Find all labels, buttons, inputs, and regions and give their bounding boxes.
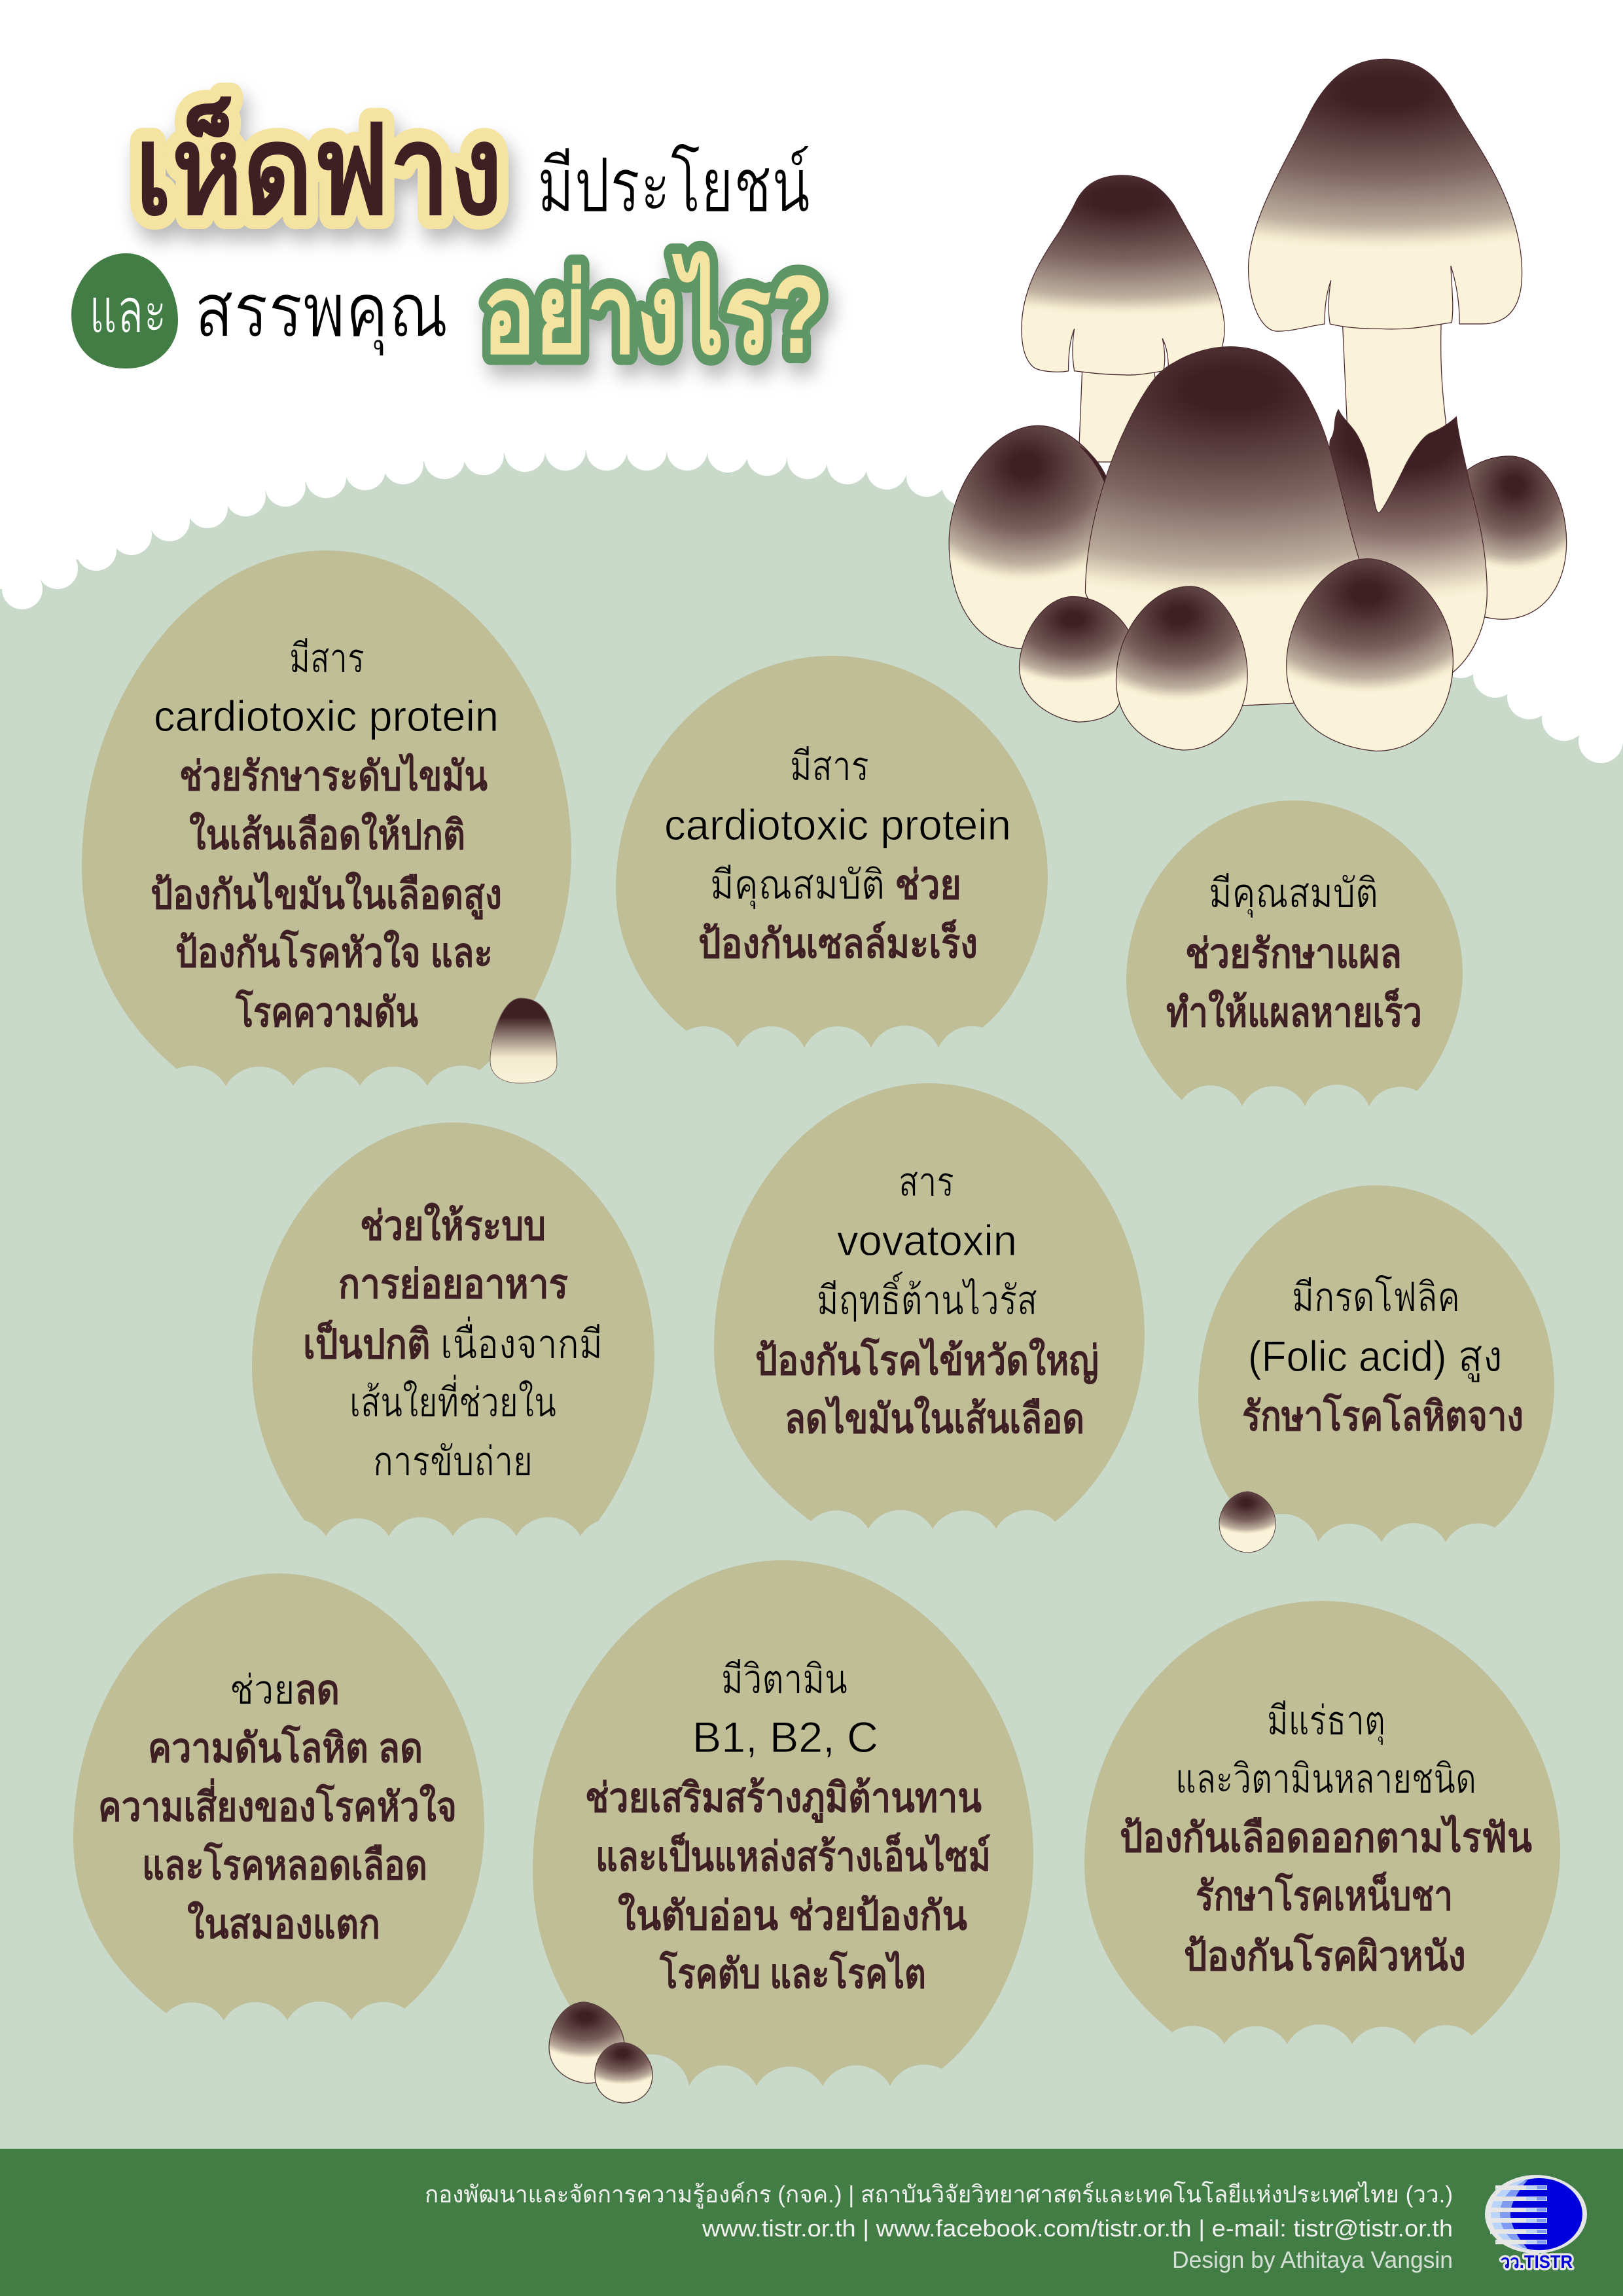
torn volva xyxy=(1316,410,1487,675)
bubble: vitamins B1 B2 C: ในตับอ่อน ช่วยป้องกัน xyxy=(618,1892,967,1939)
bubble: cardiotoxic protein, lipid levels: ในเส้นเลือดให้ปกติ xyxy=(189,812,465,858)
bubble: minerals and vitamins: ป้องกันเลือดออกตามไรฟัน xyxy=(1120,1814,1532,1861)
small egg right xyxy=(1287,559,1453,751)
bubble: vitamins B1 B2 C: โรคตับ และโรคไต xyxy=(659,1950,926,1997)
bubble: blood pressure: ความเสี่ยงของโรคหัวใจ xyxy=(98,1778,457,1830)
footer bar xyxy=(0,2149,1623,2296)
bubble: digestion: เส้นใยที่ช่วยใน xyxy=(349,1374,556,1426)
bubble: digestion: การขับถ่าย xyxy=(373,1439,533,1484)
bubble: minerals and vitamins: ป้องกันโรคผิวหนัง xyxy=(1184,1932,1466,1979)
bubble: folic acid: มีกรดโฟลิค xyxy=(1292,1274,1460,1320)
bubble: cardiotoxic protein, lipid levels: cardiotoxic protein xyxy=(154,692,499,740)
bubble: wound healing: ช่วยรักษาแผล xyxy=(1185,931,1402,977)
icon: small mushroom, folic acid bubble xyxy=(1219,1492,1275,1552)
bubble: minerals and vitamins: และวิตามินหลายชนิด xyxy=(1175,1757,1476,1802)
title word: อย่างไร?: อย่างไร? xyxy=(482,251,825,377)
footer text: www.tistr.or.th | www.facebook.com/tistr.or.th | e-mail: tistr@tistr.or.th xyxy=(702,2215,1453,2242)
green egg badge: และ xyxy=(71,253,178,368)
title xyxy=(71,96,825,377)
right back egg xyxy=(1465,456,1567,619)
bubble: blood pressure xyxy=(73,1573,484,2020)
title word: เห็ดฟาง: เห็ดฟาง xyxy=(135,96,503,240)
bubble: cardiotoxic protein, lipid levels: ช่วยรักษาระดับไขมัน xyxy=(179,753,488,799)
bubble: cardiotoxic protein, lipid levels: โรคความดัน xyxy=(235,988,418,1035)
right mushroom stem xyxy=(1342,321,1450,559)
bubble: cardiotoxic protein, cancer: ป้องกันเซลล์มะเร็ง xyxy=(698,919,978,967)
bubble: vovatoxin: ป้องกันโรคไข้หวัดใหญ่ xyxy=(755,1336,1099,1384)
bubble: cardiotoxic protein, lipid levels: ป้องกันไขมันในเลือดสูง xyxy=(151,871,502,920)
bubble: vitamins B1 B2 C: B1, B2, C xyxy=(692,1713,878,1761)
bubble: blood pressure: ช่วยลด xyxy=(230,1668,340,1713)
bubble: vitamins B1 B2 C: มีวิตามิน xyxy=(721,1657,847,1702)
title words: มีประโยชน์: มีประโยชน์ xyxy=(537,143,810,228)
bubble: cardiotoxic protein, lipid levels xyxy=(82,550,571,1086)
left mushroom cap xyxy=(1022,175,1224,375)
bubble: vovatoxin: ลดไขมันในเส้นเลือด xyxy=(785,1395,1084,1442)
bubble: vovatoxin: vovatoxin xyxy=(837,1216,1017,1265)
bubble: cardiotoxic protein, lipid levels: มีสาร xyxy=(289,636,365,681)
bubble: vitamins B1 B2 C xyxy=(533,1560,1033,2086)
bubble: minerals and vitamins: รักษาโรคเหน็บชา xyxy=(1196,1871,1453,1919)
bubble: cardiotoxic protein, cancer: มีคุณสมบัติ ช่วย xyxy=(710,863,961,909)
small egg left xyxy=(1019,596,1131,722)
footer text xyxy=(425,2181,1453,2273)
bubble: digestion: การย่อยอาหาร xyxy=(338,1262,568,1307)
small egg middle xyxy=(1116,586,1247,750)
bubble: digestion: ช่วยให้ระบบ xyxy=(360,1202,546,1249)
right mushroom cap xyxy=(1249,59,1522,331)
green egg badge: และ: และ xyxy=(89,276,167,346)
icon: small mushroom, first bubble xyxy=(490,998,557,1083)
bubble: wound healing: มีคุณสมบัติ xyxy=(1209,871,1378,918)
bubble: digestion xyxy=(252,1122,654,1536)
centre mushroom xyxy=(1085,347,1376,706)
bubble: vitamins B1 B2 C: ช่วยเสริมสร้างภูมิต้านทาน xyxy=(585,1776,982,1823)
bubble: folic acid: รักษาโรคโลหิตจาง xyxy=(1242,1392,1524,1439)
illustration: straw mushroom cluster xyxy=(949,59,1567,751)
bubble: blood pressure: และโรคหลอดเลือด xyxy=(142,1841,427,1888)
logo: TISTR xyxy=(1485,2175,1587,2272)
bubble: wound healing xyxy=(1126,800,1463,1106)
dark sliver xyxy=(1080,446,1107,484)
bubble: vovatoxin: สาร xyxy=(899,1160,954,1205)
icon: two small mushrooms, vitamin bubble xyxy=(549,2002,652,2103)
bubble: vovatoxin: มีฤทธิ์ต้านไวรัส xyxy=(817,1271,1037,1323)
bubble: vitamins B1 B2 C: และเป็นแหล่งสร้างเอ็นไซม์ xyxy=(596,1832,991,1880)
bubble: cardiotoxic protein, cancer: cardiotoxic protein xyxy=(664,800,1011,849)
bubble: blood pressure: ในสมองแตก xyxy=(187,1901,380,1947)
bubble: minerals and vitamins xyxy=(1084,1601,1560,2044)
bubble: cardiotoxic protein, lipid levels: ป้องกันโรคหัวใจ และ xyxy=(175,929,493,976)
bubble: wound healing: ทำให้แผลหายเร็ว xyxy=(1166,988,1422,1035)
bubble: cardiotoxic protein, cancer xyxy=(616,656,1048,1048)
bubble: cardiotoxic protein, cancer: มีสาร xyxy=(790,744,869,789)
bubble: vovatoxin xyxy=(714,1083,1145,1529)
logo: TISTR: วว.TISTR xyxy=(1501,2251,1573,2272)
title words: สรรพคุณ: สรรพคุณ xyxy=(194,269,448,356)
left back egg xyxy=(949,425,1107,649)
bubble: folic acid xyxy=(1198,1185,1554,1542)
bubble: minerals and vitamins: มีแร่ธาตุ xyxy=(1267,1698,1385,1745)
bubble: digestion: เป็นปกติ เนื่องจากมี xyxy=(303,1316,603,1367)
bubble: blood pressure: ความดันโลหิต ลด xyxy=(148,1724,423,1771)
bubble: folic acid: (Folic acid) สูง xyxy=(1248,1332,1503,1383)
white scalloped header area xyxy=(0,0,1623,743)
footer text: Design by Athitaya Vangsin xyxy=(1172,2246,1453,2273)
left mushroom stem xyxy=(1079,371,1165,462)
footer text: กองพัฒนาและจัดการความรู้องค์กร (กจค.) | สถาบันวิจัยวิทยาศาสตร์และเทคโนโลยีแห่งประเทศไทย (วว.) xyxy=(425,2181,1453,2209)
